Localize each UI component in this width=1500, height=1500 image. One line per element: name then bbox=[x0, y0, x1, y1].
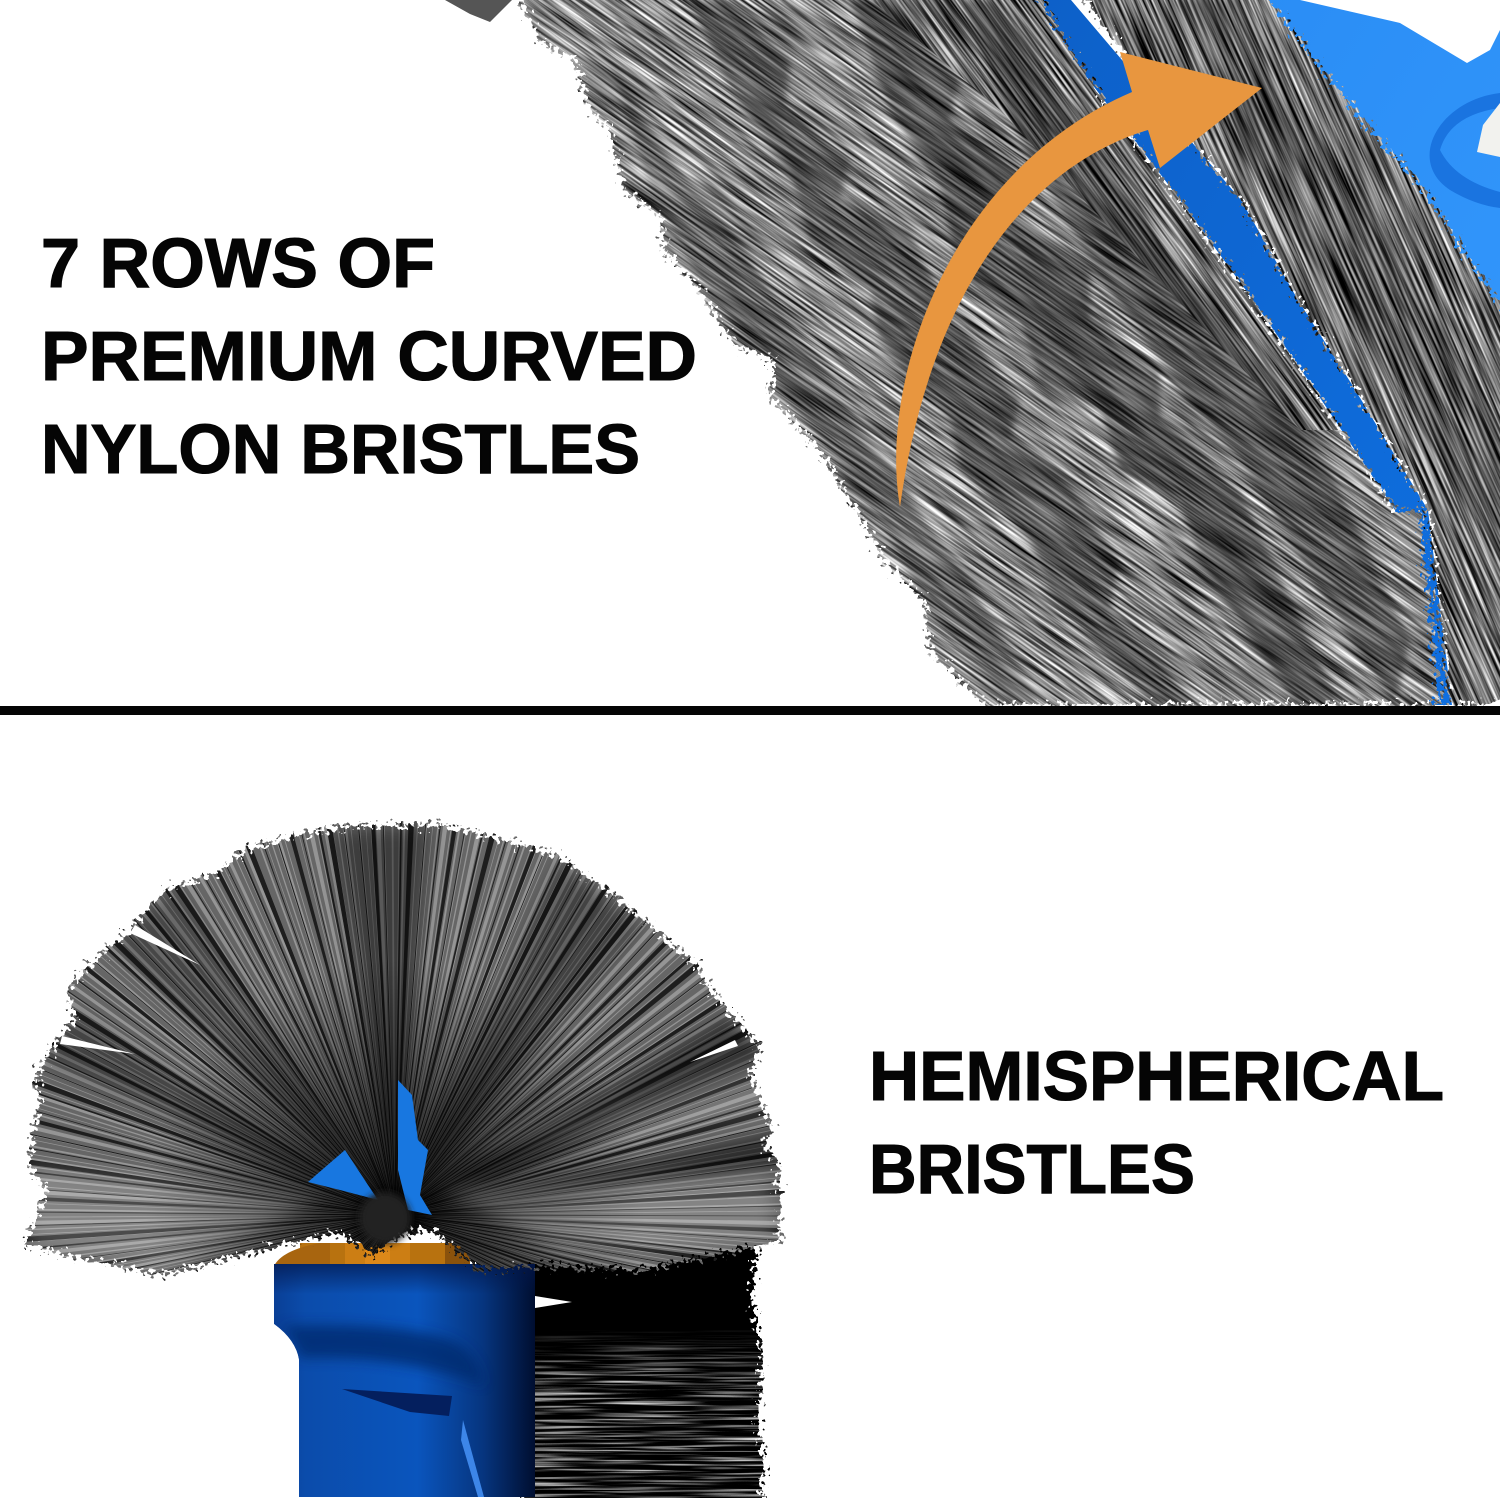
white gap in back bristles bbox=[535, 1296, 572, 1308]
blue gap between bristle rows bbox=[1028, 0, 1452, 705]
blue brush head bbox=[1245, 0, 1500, 400]
divider bbox=[0, 706, 1500, 715]
heading: top: NYLON BRISTLES bbox=[41, 410, 640, 488]
heading: top: PREMIUM CURVED bbox=[41, 317, 697, 395]
icon: brush fragment at top edge bbox=[445, 0, 512, 22]
heading: bottom: BRISTLES bbox=[869, 1130, 1195, 1208]
orange collar bbox=[274, 1243, 470, 1267]
heading: bottom bbox=[869, 1037, 1444, 1208]
hemispherical bristle dome bbox=[22, 818, 788, 1281]
outer bristle row bbox=[1082, 0, 1500, 706]
handle bbox=[274, 1264, 535, 1497]
bristle centre tuft bbox=[359, 1192, 411, 1244]
blue core through the bristles bbox=[308, 1080, 432, 1215]
heading: top: 7 ROWS OF bbox=[41, 224, 435, 302]
white slits between tufts bbox=[60, 925, 738, 1062]
heading: top bbox=[41, 224, 697, 488]
bristle mass bbox=[517, 0, 1444, 706]
panel: hemispherical brush bbox=[0, 800, 800, 1498]
arrow: orange curved arrow bbox=[896, 52, 1262, 507]
heading: bottom: HEMISPHERICAL bbox=[869, 1037, 1444, 1115]
back bristles bbox=[520, 1240, 770, 1498]
panel: top rows of bristles bbox=[445, 0, 1500, 706]
